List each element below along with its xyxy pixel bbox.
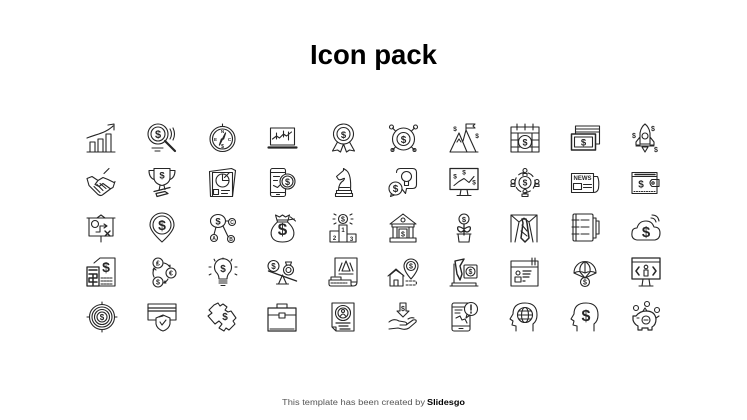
icon: location pin: $ (158, 217, 166, 233)
icon: trophy (149, 168, 175, 196)
icon: mountain flag: $ (453, 126, 457, 133)
icon: idea bulb (209, 258, 237, 286)
icon: mountain flag (450, 124, 479, 152)
icon: strategy board (87, 215, 115, 242)
icon: people around coin: $ (523, 178, 528, 188)
icon: currency cycle (153, 258, 176, 287)
icon: network coin: $ (215, 216, 221, 228)
icon: network coin: B (229, 237, 233, 243)
footer credit (282, 398, 465, 407)
icon: head dollar: $ (582, 308, 591, 325)
icon: certificate (332, 303, 354, 331)
icon: money stack: $ (581, 138, 587, 148)
icon: podium: 1 (341, 228, 345, 234)
icon: laptop coin rocket (450, 259, 478, 286)
icon: medal (332, 124, 354, 152)
icon: house to location (388, 259, 418, 286)
icon: mountain flag: $ (475, 133, 479, 140)
icon: podium (330, 214, 356, 243)
icon: podium: 2 (333, 236, 337, 242)
icon: monitor chart: $ (472, 180, 476, 186)
icon: puzzle (208, 303, 236, 331)
icon: hand with dollar arrow (389, 303, 416, 329)
icon: network coin: A (212, 236, 216, 242)
icon: money stack (572, 126, 600, 150)
icon: compass: N (221, 129, 224, 134)
icon: bulb and coin chat: $ (393, 184, 399, 195)
icon: money bag (271, 215, 296, 242)
icon: newspaper (572, 174, 599, 192)
icon: bank: $ (401, 232, 405, 238)
icon: browser window (511, 258, 538, 286)
icon: rocket (632, 124, 658, 154)
footer credit: Slidesgo (427, 398, 465, 407)
icon: piggy bank (633, 302, 660, 330)
icon: medal: $ (341, 130, 347, 141)
icon: compass: E (214, 137, 217, 142)
icon: document with scroll (329, 258, 357, 286)
icon: currency cycle: ₤ (156, 260, 160, 268)
icon: newspaper: NEWS (574, 176, 592, 182)
icon: growth chart (87, 124, 115, 152)
icon: compass: $ (221, 144, 224, 150)
icon: rocket: $ (654, 147, 658, 154)
icon: idea bulb: $ (220, 264, 226, 275)
footer credit: This template has been created by (282, 398, 425, 407)
icon: coin with connected nodes: $ (401, 135, 407, 146)
icon: rocket: $ (651, 126, 655, 133)
icon: calculator and document (87, 258, 115, 286)
icon: phone with coin (270, 168, 295, 196)
icon: magnifier coin (148, 124, 175, 151)
icon: cloud money (632, 215, 660, 241)
icon: monitor chart: $ (453, 174, 457, 180)
icon: plant coin (457, 214, 471, 242)
icon: money bag: $ (278, 220, 288, 239)
icon: network coin (210, 214, 236, 243)
icon: target coin: $ (100, 313, 105, 322)
title: Icon pack (310, 39, 438, 70)
icon: calendar (511, 124, 539, 152)
icon: house to location: $ (409, 264, 413, 270)
icon: bank (390, 214, 416, 242)
icon: plant coin: $ (462, 215, 467, 224)
icon: wallet: $ (638, 180, 644, 190)
icon: phone alert (452, 302, 478, 331)
icon: monitor code (632, 258, 660, 286)
icon: puzzle: $ (222, 312, 228, 323)
icon: laptop chart (268, 128, 296, 148)
icon: calendar: $ (522, 138, 528, 148)
icon: network coin: C (230, 220, 234, 226)
icon: hand with dollar arrow: $ (401, 306, 405, 313)
icon: people around coin (511, 168, 539, 196)
icon: podium: 3 (350, 237, 354, 243)
icon: trophy: $ (159, 170, 165, 182)
icon: magnifier coin: $ (155, 129, 161, 141)
icon: wallet (632, 172, 659, 194)
icon: card shield (148, 304, 176, 331)
icon: balance seesaw: $ (271, 262, 276, 271)
icon: podium: $ (341, 216, 345, 224)
icon: compass: C (228, 137, 232, 142)
icon: monitor chart: $ (462, 170, 466, 176)
icon: compass (210, 124, 235, 152)
icon: parachute coin: $ (583, 280, 587, 286)
icon: head dollar (571, 303, 598, 331)
icon: rocket: $ (632, 133, 636, 140)
icon: shirt and tie (511, 215, 537, 242)
icon: briefcase (268, 304, 296, 331)
icon: target coin (87, 302, 117, 332)
icon: handshake (87, 168, 115, 196)
icon: cloud money: $ (642, 224, 651, 241)
icon: laptop coin rocket: $ (469, 269, 473, 276)
icon: coin with connected nodes (390, 125, 418, 152)
icon: head globe (510, 303, 537, 331)
icon: currency cycle: € (169, 270, 173, 278)
icon: notebook (572, 214, 599, 241)
icon: chess knight (336, 168, 352, 196)
icon: phone with coin: $ (285, 177, 290, 187)
icon: location pin (150, 213, 174, 242)
icon: balance seesaw (268, 260, 296, 284)
icon: calculator and document: $ (102, 259, 110, 275)
icon: currency cycle: $ (156, 280, 160, 286)
icon: bulb and coin chat (389, 168, 416, 196)
icon: parachute coin (574, 262, 596, 286)
icon: pie chart report (210, 168, 236, 196)
icon: monitor chart (450, 168, 478, 196)
